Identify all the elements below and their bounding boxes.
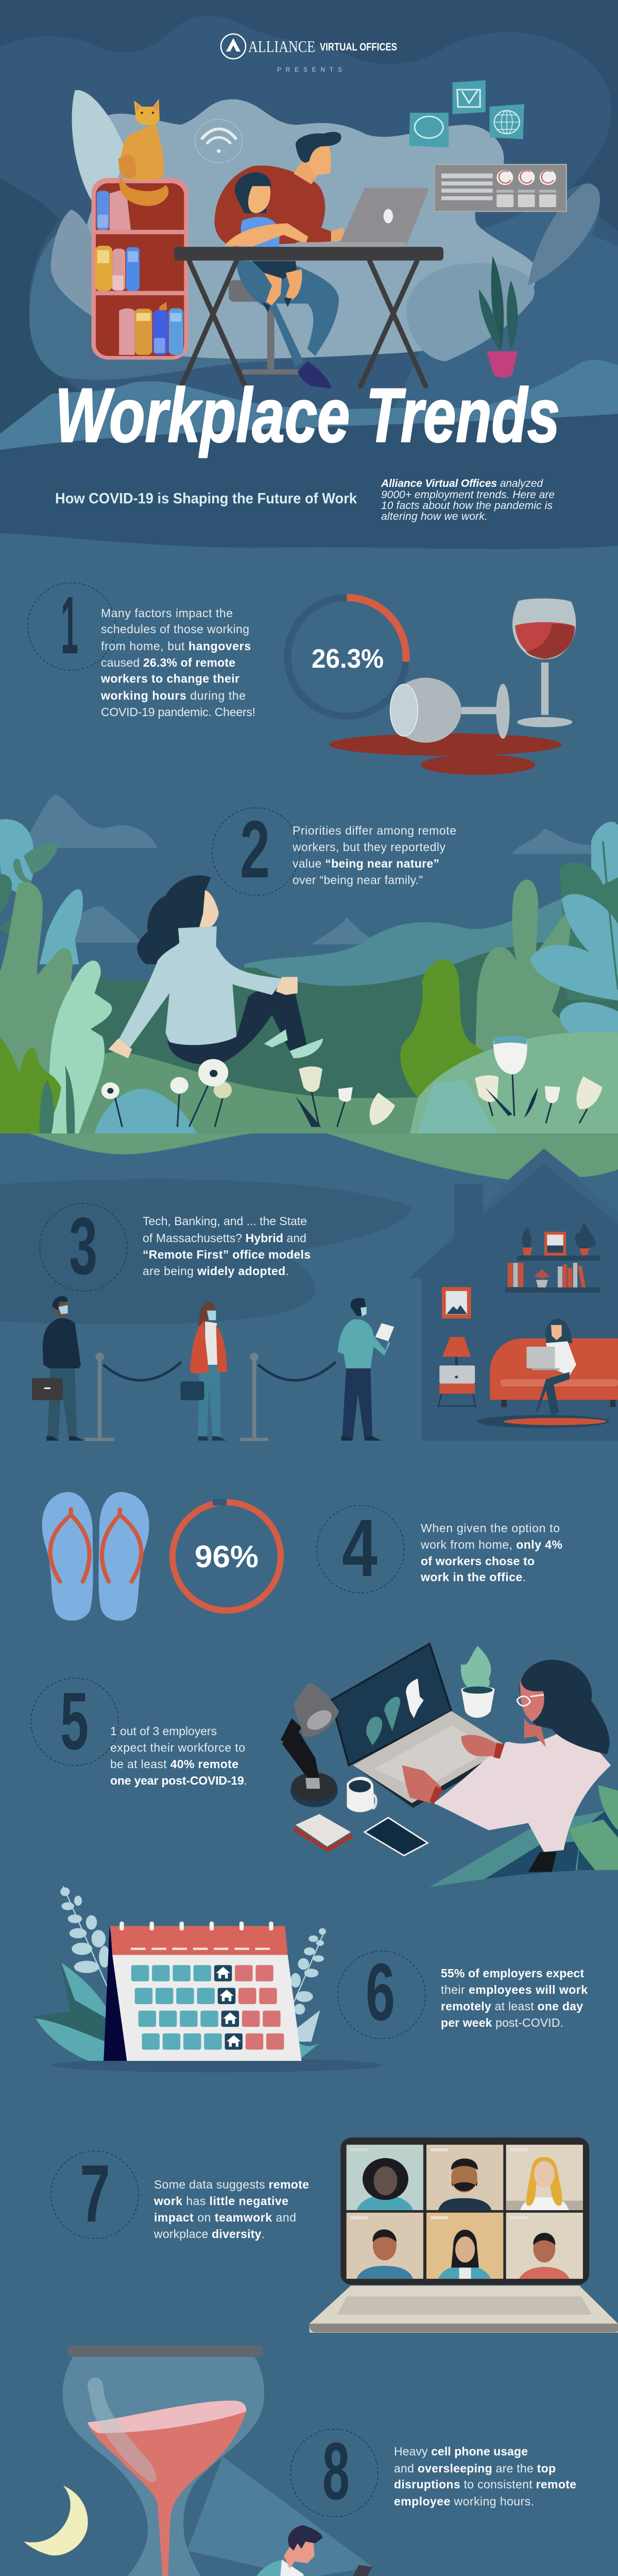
number badge 5 — [31, 1676, 118, 1767]
illustration: woman in nature — [0, 794, 618, 1133]
number badge 7: 7 — [80, 2148, 110, 2239]
illustration: wine glasses and spill — [329, 599, 576, 775]
donut chart 96%: 96% — [195, 1539, 259, 1574]
text: fact 6: their employees will work — [441, 1983, 588, 1996]
text: fact 5: 1 out of 3 employers — [110, 1724, 217, 1738]
logo: Alliance Virtual Offices (top): ALLIANCE — [248, 37, 315, 56]
bookshelf — [92, 178, 188, 360]
text: fact 7: impact on teamwork and — [154, 2211, 296, 2224]
text: fact 6: per week post-COVID. — [441, 2016, 563, 2029]
moon — [24, 2485, 88, 2555]
illustration: calendar with plants — [33, 1886, 382, 2073]
text: fact 3: Tech, Banking, and ... the State — [143, 1214, 307, 1228]
text: fact 7 — [153, 2178, 309, 2241]
illustration: woman at laptop with lamp, mug, notepad and phone — [281, 1644, 618, 1887]
text: fact 3: are being widely adopted. — [143, 1264, 289, 1278]
text: fact 1: schedules of those working — [101, 622, 249, 636]
text: fact 2: Priorities differ among remote — [293, 824, 456, 837]
left foliage — [0, 819, 197, 1133]
logo: Alliance Virtual Offices (top): VIRTUAL OFFICES — [320, 41, 397, 53]
text: fact 4 — [420, 1521, 562, 1584]
number badge 3 — [40, 1201, 127, 1292]
icon: chat, mail and globe tiles — [409, 80, 524, 147]
illustration: flip-flops — [42, 1492, 149, 1621]
queue of three workers with stanchions — [32, 1296, 394, 1441]
text: fact 5: be at least 40% remote — [110, 1757, 238, 1771]
text: fact 4: work in the office. — [420, 1570, 526, 1584]
right foliage — [400, 822, 618, 1133]
text: fact 3: “Remote First” office models — [143, 1248, 311, 1261]
intro text: altering how we work. — [381, 511, 488, 522]
text: fact 1: COVID-19 pandemic. Cheers! — [101, 705, 255, 719]
intro text: 9000+ employment trends. Here are — [381, 489, 555, 501]
text: fact 5: one year post-COVID-19. — [110, 1774, 247, 1787]
mug, notepad and phone — [294, 1777, 427, 1856]
flowers — [101, 1036, 602, 1127]
number badge 2 — [212, 804, 300, 895]
text: fact 1: workers to change their — [100, 672, 239, 685]
number badge 7 — [51, 2148, 139, 2239]
desk lamp — [281, 1684, 339, 1807]
text: fact 5: expect their workforce to — [110, 1741, 245, 1754]
hero illustration panel — [0, 0, 618, 549]
illustration: hourglass, moon, sun and man on phone — [24, 2345, 613, 2576]
text: fact 4: When given the option to — [421, 1521, 560, 1535]
illustration: laptop video call — [310, 2138, 618, 2333]
illustration: green hill edge, queue of masked workers and home office — [0, 1133, 618, 1441]
text: fact 1: from home, but hangovers — [101, 639, 251, 653]
woman typing — [402, 1660, 611, 1872]
man with child at desk — [174, 132, 443, 388]
fact 3 panel — [0, 1133, 618, 1441]
number badge 3: 3 — [69, 1201, 97, 1292]
text: fact 1: working hours during the — [100, 689, 246, 702]
text: fact 5 — [110, 1724, 247, 1787]
text: fact 6 — [441, 1967, 588, 2029]
fact 2 panel — [0, 794, 618, 1133]
fact 6 panel — [33, 1886, 588, 2073]
text: fact 4: work from home, only 4% — [420, 1538, 562, 1551]
plant in magenta pot — [479, 256, 518, 378]
text: fact 7: workplace diversity. — [153, 2227, 265, 2241]
hourglass — [55, 2345, 268, 2576]
donut chart 26.3% — [287, 598, 406, 716]
text: fact 6: remotely at least one day — [441, 1999, 583, 2013]
text: fact 1: caused 26.3% of remote — [101, 656, 235, 669]
number badge 4 — [317, 1503, 404, 1594]
donut chart 26.3%: 26.3% — [312, 644, 384, 674]
number badge 1 — [28, 580, 115, 671]
fact 7 panel — [51, 2138, 618, 2333]
text: fact 2: over “being near family.” — [293, 873, 423, 887]
calendar — [104, 1924, 301, 2061]
number badge 8 — [290, 2426, 378, 2517]
video tiles — [347, 2145, 583, 2279]
foliage sprigs — [60, 1886, 326, 2014]
number badge 4: 4 — [342, 1503, 377, 1594]
number badge 5: 5 — [60, 1676, 89, 1767]
text: fact 2 — [292, 824, 456, 887]
text: fact 8: Heavy cell phone usage — [394, 2445, 528, 2458]
text: fact 8 — [394, 2445, 576, 2508]
donut chart 96% — [173, 1502, 281, 1611]
text: fact 1 — [100, 606, 255, 719]
text: fact 2: value “being near nature” — [293, 857, 439, 870]
intro text — [381, 478, 555, 522]
potted plant — [461, 1646, 494, 1718]
fact 4 panel — [42, 1492, 562, 1621]
right leaves — [570, 1785, 618, 1870]
text: fact 7: work has little negative — [153, 2194, 288, 2208]
laptop — [331, 1644, 510, 1808]
home office interior — [437, 1222, 618, 1428]
text: fact 2: workers, but they reportedly — [292, 840, 446, 854]
intro text: Alliance Virtual Offices analyzed — [381, 478, 543, 489]
logo: Alliance Virtual Offices (top) — [221, 34, 397, 59]
fact 8 panel — [24, 2345, 613, 2576]
fact 1 panel — [28, 580, 576, 775]
dashboard panel — [434, 164, 566, 211]
number badge 1: 1 — [61, 580, 78, 671]
text: fact 4: of workers chose to — [421, 1554, 535, 1568]
subtitle: How COVID-19 is Shaping the Future of Work — [55, 490, 357, 507]
man with phone — [243, 2526, 482, 2576]
number badge 8: 8 — [322, 2426, 350, 2517]
cat — [118, 99, 168, 206]
presents label: PRESENTS — [277, 66, 342, 73]
text: fact 7: Some data suggests remote — [154, 2178, 309, 2191]
intro text: 10 facts about how the pandemic is — [381, 500, 553, 512]
house silhouette — [409, 1164, 618, 1440]
number badge 6: 6 — [366, 1947, 395, 2038]
icon: wifi — [195, 119, 243, 163]
number badge 6 — [338, 1947, 425, 2039]
text: fact 1: Many factors impact the — [101, 606, 233, 620]
text: fact 3 — [143, 1214, 311, 1278]
woman sitting — [108, 875, 323, 1064]
text: fact 3: of Massachusetts? Hybrid and — [143, 1231, 306, 1245]
text: fact 8: and oversleeping are the top — [394, 2462, 556, 2475]
text: fact 8: employee working hours. — [394, 2495, 534, 2508]
fact 5 panel — [31, 1644, 618, 1887]
number badge 2: 2 — [240, 804, 270, 895]
text: fact 8: disruptions to consistent remote — [394, 2478, 576, 2491]
text: fact 6: 55% of employers expect — [441, 1967, 584, 1980]
